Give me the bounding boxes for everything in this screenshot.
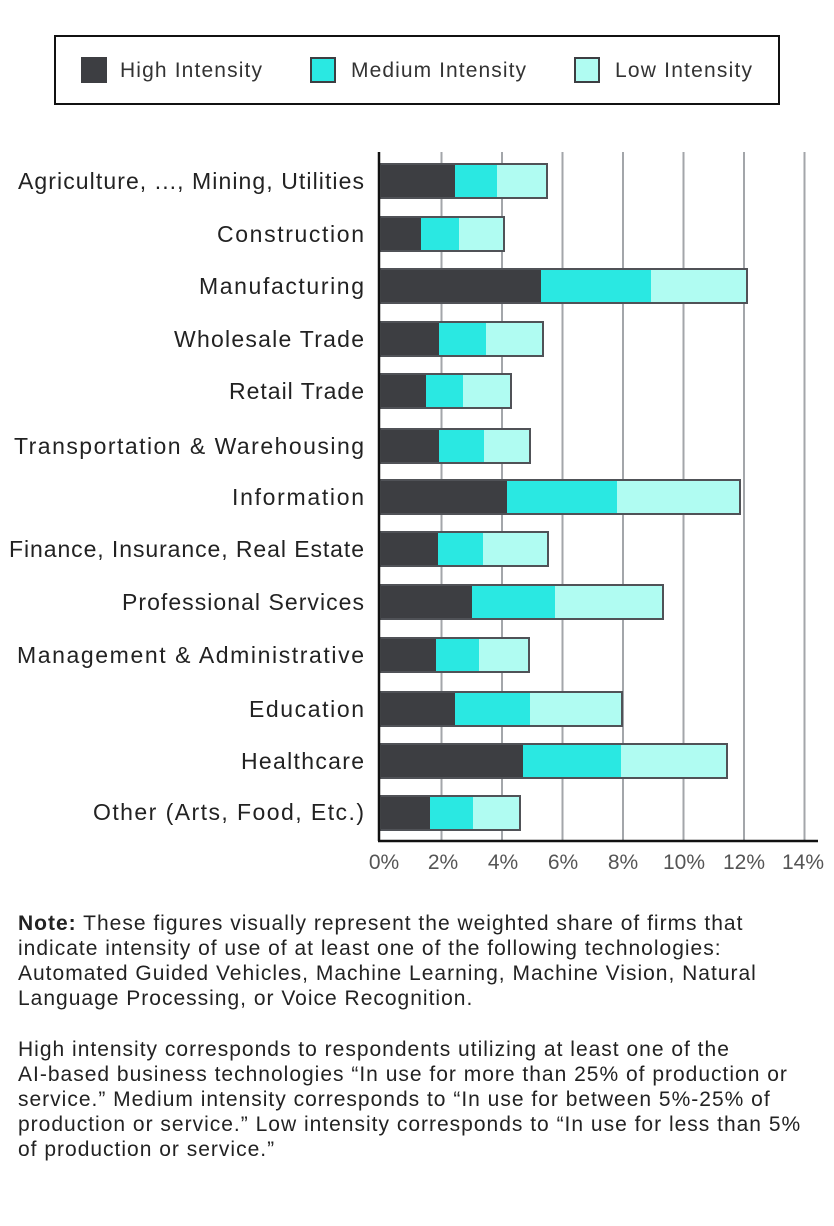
category labels: Retail Trade <box>229 378 364 404</box>
category labels: Finance, Insurance, Real Estate <box>9 536 364 562</box>
note text: service.” Medium intensity corresponds to “In use for between 5%-25% of <box>18 1088 771 1111</box>
category labels: Healthcare <box>241 748 364 774</box>
category labels: Manufacturing <box>199 273 364 299</box>
category labels: Education <box>249 696 364 722</box>
note text: AI-based business technologies “In use for more than 25% of production or <box>18 1063 788 1086</box>
note text: production or service.” Low intensity corresponds to “In use for less than 5% <box>18 1113 801 1136</box>
note text: Automated Guided Vehicles, Machine Learning, Machine Vision, Natural <box>18 962 757 985</box>
category labels: Management & Administrative <box>17 642 364 668</box>
x axis ticks: 12% <box>723 851 765 874</box>
x axis ticks: 10% <box>663 851 705 874</box>
x axis ticks: 6% <box>548 851 578 874</box>
category labels: Wholesale Trade <box>174 326 364 352</box>
x axis ticks: 0% <box>369 851 399 874</box>
gridlines <box>442 152 804 841</box>
category labels: Professional Services <box>122 589 364 615</box>
x axis ticks <box>369 851 824 874</box>
note text: of production or service.” <box>18 1138 275 1161</box>
bar chart <box>380 163 747 831</box>
note text: Language Processing, or Voice Recognition. <box>18 987 473 1010</box>
x axis ticks: 8% <box>608 851 638 874</box>
category labels: Information <box>232 484 364 510</box>
category labels: Construction <box>217 221 364 247</box>
legend <box>55 36 779 104</box>
x axis ticks: 2% <box>428 851 458 874</box>
note text <box>18 912 801 1161</box>
note text: High intensity corresponds to respondents utilizing at least one of the <box>18 1038 730 1061</box>
axes <box>378 152 818 841</box>
legend: Low Intensity <box>615 59 752 82</box>
x axis ticks: 14% <box>782 851 824 874</box>
note text: indicate intensity of use of at least one of the following technologies: <box>18 937 722 960</box>
category labels: Agriculture, ..., Mining, Utilities <box>18 168 364 194</box>
category labels: Other (Arts, Food, Etc.) <box>93 799 364 825</box>
category labels <box>9 168 364 825</box>
legend: High Intensity <box>120 59 262 82</box>
category labels: Transportation & Warehousing <box>14 433 364 459</box>
x axis ticks: 4% <box>488 851 518 874</box>
note text: Note: These figures visually represent the weighted share of firms that <box>18 912 743 935</box>
legend: Medium Intensity <box>351 59 526 82</box>
